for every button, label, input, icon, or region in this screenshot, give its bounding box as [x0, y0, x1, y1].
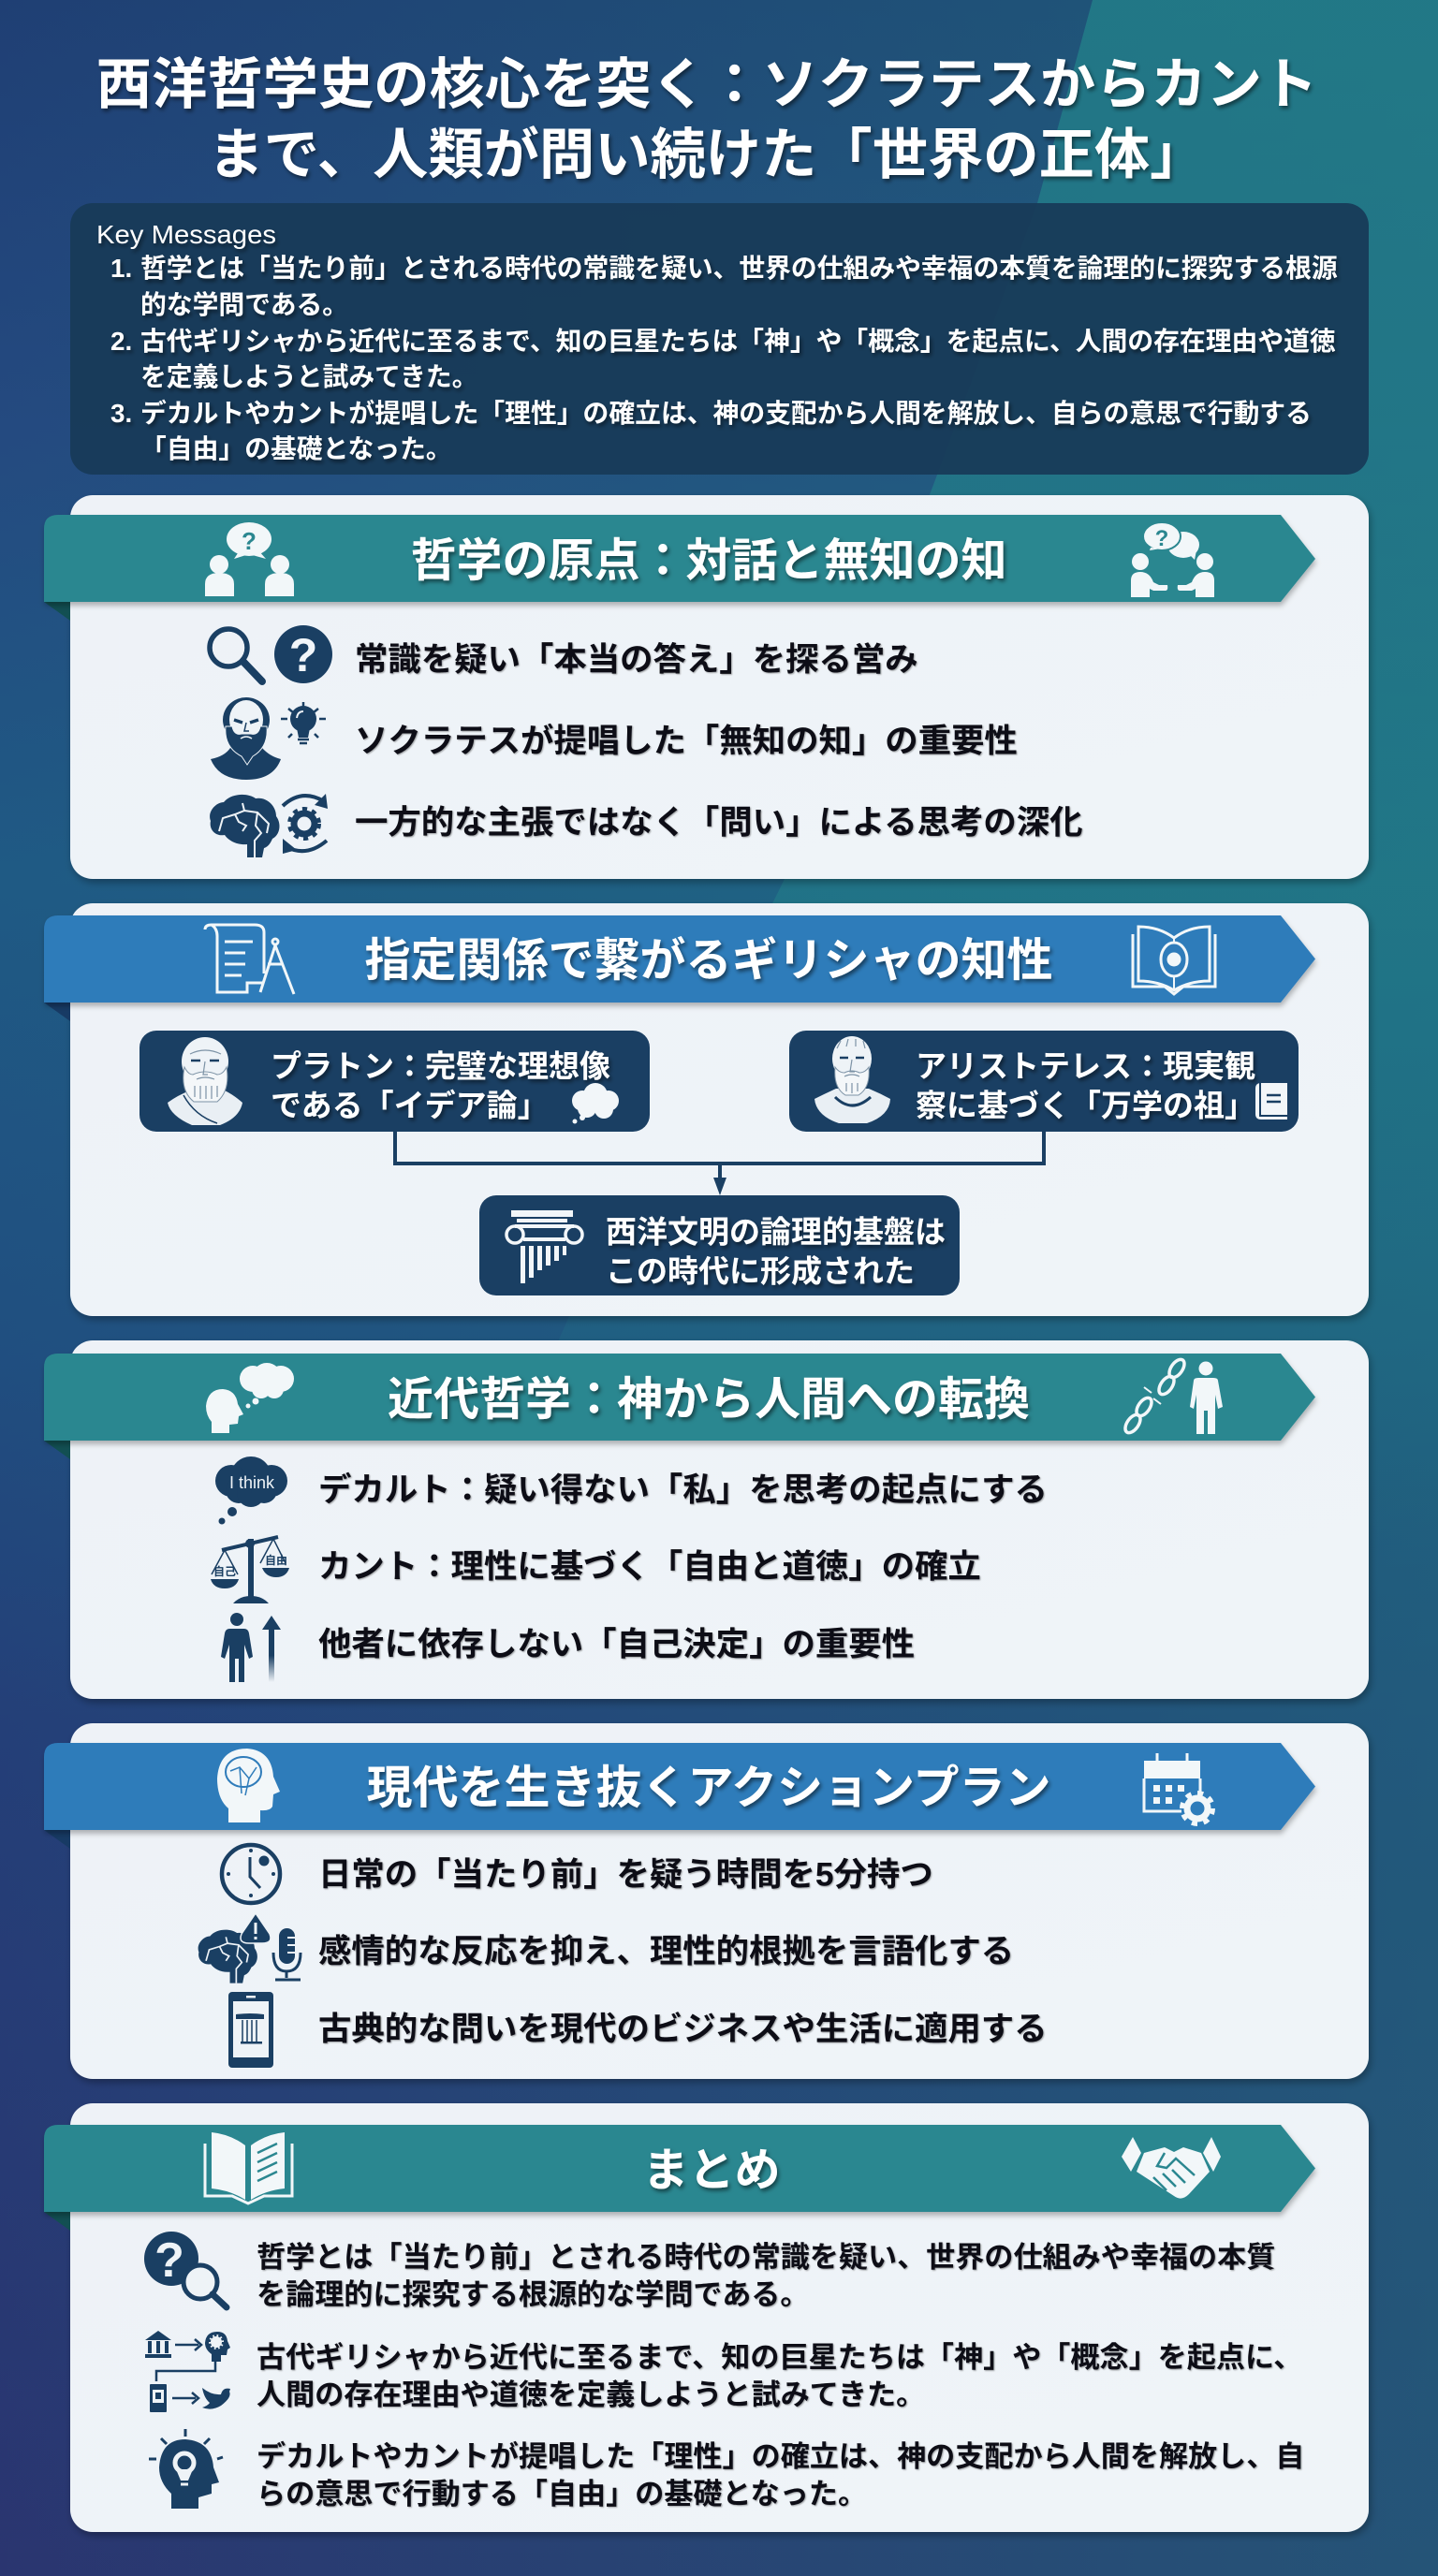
ribbon heading 5: まとめ — [642, 2145, 781, 2196]
item 1: text: 日常の「当たり前」を疑う時間を5分持つ — [318, 1855, 933, 1893]
key messages text: 「自由」の基礎となった。 — [140, 434, 452, 463]
panel: 哲学の原点 — [44, 495, 1369, 879]
ribbon heading 3: 近代哲学：神から人間への転換 — [388, 1374, 1030, 1425]
item 1: icon question and magnifier: ? — [154, 2233, 184, 2288]
box text: アリストテレス：現実観 — [916, 1048, 1255, 1084]
item 1: text: を論理的に探究する根源的な学問である。 — [257, 2278, 809, 2311]
item 1: icon I think cloud: I think — [229, 1473, 275, 1492]
item 3: text: 他者に依存しない「自己決定」の重要性 — [318, 1625, 915, 1662]
item 1: text: 哲学とは「当たり前」とされる時代の常識を疑い、世界の仕組みや幸福の本質 — [257, 2241, 1275, 2274]
item 2: text: 感情的な反応を抑え、理性的根拠を言語化する — [318, 1932, 1014, 1969]
ribbon heading 4 — [44, 1743, 1315, 1849]
ribbon heading 1: 哲学の原点：対話と無知の知 — [410, 535, 1007, 586]
item 3: text — [257, 2440, 1304, 2510]
icon: broken chain and person — [1123, 1357, 1223, 1435]
connector arrow — [395, 1132, 1044, 1195]
box text: 察に基づく「万学の祖」 — [916, 1088, 1255, 1123]
item 1: icons: ? — [289, 629, 317, 681]
item 3: icons brain and gear cycle — [210, 794, 328, 857]
item 2: icon Socrates and bulb — [211, 697, 326, 780]
icon: book — [1255, 1083, 1287, 1120]
ribbon heading 2: 指定関係で繋がるギリシャの知性 — [364, 936, 1053, 987]
icon: head with brain — [217, 1749, 280, 1822]
ribbon heading 4: 現代を生き抜くアクションプラン — [366, 1764, 1051, 1814]
item 2: icon scales: 自由 — [265, 1553, 287, 1567]
item 1: icon I think cloud — [215, 1456, 287, 1524]
item 1: icons — [210, 625, 332, 683]
item 2: text: 古代ギリシャから近代に至るまで、知の巨星たちは「神」や「概念」を起点に、 — [257, 2341, 1302, 2374]
key messages text: 3. — [110, 399, 132, 428]
panel: key messages — [70, 203, 1369, 475]
item 2: icon scales: 自己 — [213, 1564, 236, 1578]
item 2: text: カント：理性に基づく「自由と道徳」の確立 — [318, 1548, 981, 1586]
panel: 近代哲学 — [44, 1340, 1369, 1699]
key messages text: を定義しようと試みてきた。 — [140, 362, 478, 391]
item 2: icon flow temple brain phone bird — [145, 2331, 230, 2412]
item 2: icon scales — [211, 1537, 289, 1603]
icon: handshake — [1122, 2137, 1221, 2199]
box: Plato — [139, 1031, 650, 1132]
box text: プラトン：完璧な理想像 — [271, 1048, 610, 1084]
key messages text: 古代ギリシャから近代に至るまで、知の巨星たちは「神」や「概念」を起点に、人間の存在理由や道徳 — [140, 327, 1336, 356]
item 3: icon phone with column — [228, 1992, 273, 2068]
item 3: text: らの意思で行動する「自由」の基礎となった。 — [257, 2478, 867, 2510]
box text: この時代に形成された — [606, 1254, 915, 1288]
item 3: icon head with bulb — [149, 2429, 223, 2509]
panel: まとめ — [44, 2103, 1369, 2532]
item 2: text: 人間の存在理由や道徳を定義しようと試みてきた。 — [257, 2378, 925, 2411]
ribbon heading 1 — [44, 515, 1315, 621]
title: まで、人類が問い続けた「世界の正体」 — [209, 124, 1205, 185]
item 2: text: ソクラテスが提唱した「無知の知」の重要性 — [355, 723, 1018, 760]
panel: ギリシャの知性 — [44, 903, 1369, 1316]
icon: two people talking: ? — [1155, 526, 1168, 551]
item 1: icon clock — [222, 1845, 280, 1903]
box text: 西洋文明の論理的基盤は — [606, 1215, 946, 1249]
icon: scroll and compass — [205, 925, 294, 994]
icon: open book — [205, 2132, 292, 2203]
box text: である「イデア論」 — [271, 1088, 549, 1123]
icon: calendar and gear — [1144, 1753, 1212, 1823]
box text — [606, 1215, 946, 1288]
icon: head with thought cloud — [206, 1363, 294, 1433]
ribbon heading 2 — [44, 915, 1315, 1021]
box text — [916, 1048, 1255, 1123]
title — [96, 52, 1317, 185]
key messages text: 哲学とは「当たり前」とされる時代の常識を疑い、世界の仕組みや幸福の本質を論理的に探究する根源 — [140, 254, 1338, 283]
key messages text: 1. — [110, 254, 132, 283]
ribbon heading 3 — [44, 1354, 1315, 1459]
item 3: icon person and arrow — [221, 1613, 281, 1682]
item 1: text — [257, 2241, 1275, 2311]
box text — [271, 1048, 610, 1123]
item 1: text: デカルト：疑い得ない「私」を思考の起点にする — [318, 1471, 1048, 1509]
item 3: text: 古典的な問いを現代のビジネスや生活に適用する — [318, 2011, 1048, 2048]
key messages text: 的な学問である。 — [140, 290, 348, 319]
icon: Plato bust — [168, 1037, 242, 1125]
item 3: text: デカルトやカントが提唱した「理性」の確立は、神の支配から人間を解放し、自 — [257, 2440, 1304, 2473]
icon: ionic column — [506, 1210, 582, 1283]
panel: アクションプラン — [44, 1723, 1369, 2079]
key messages text — [96, 220, 1338, 463]
icon: idea cloud — [572, 1083, 619, 1123]
box: foundation — [479, 1195, 960, 1295]
icon: Aristotle bust — [814, 1036, 890, 1123]
icon: two people talking — [1131, 522, 1214, 597]
title: 西洋哲学史の核心を突く：ソクラテスからカント — [96, 52, 1317, 116]
item 1: icon question and magnifier — [144, 2232, 227, 2307]
item 2: icon brain alert mic — [198, 1913, 301, 1983]
icon: dialogue question: ? — [242, 527, 257, 555]
item 2: text — [257, 2341, 1302, 2411]
item 1: text: 常識を疑い「本当の答え」を探る営み — [355, 640, 918, 678]
item 3: text: 一方的な主張ではなく「問い」による思考の深化 — [355, 803, 1083, 841]
box: Aristotle — [789, 1031, 1299, 1132]
key messages text: デカルトやカントが提唱した「理性」の確立は、神の支配から人間を解放し、自らの意思で行動する — [140, 399, 1312, 428]
icon: dialogue question — [205, 522, 294, 596]
ribbon heading 5 — [44, 2125, 1315, 2231]
icon: book and eye — [1133, 927, 1215, 994]
key messages text: 2. — [110, 327, 132, 356]
key messages text: Key Messages — [96, 220, 276, 249]
